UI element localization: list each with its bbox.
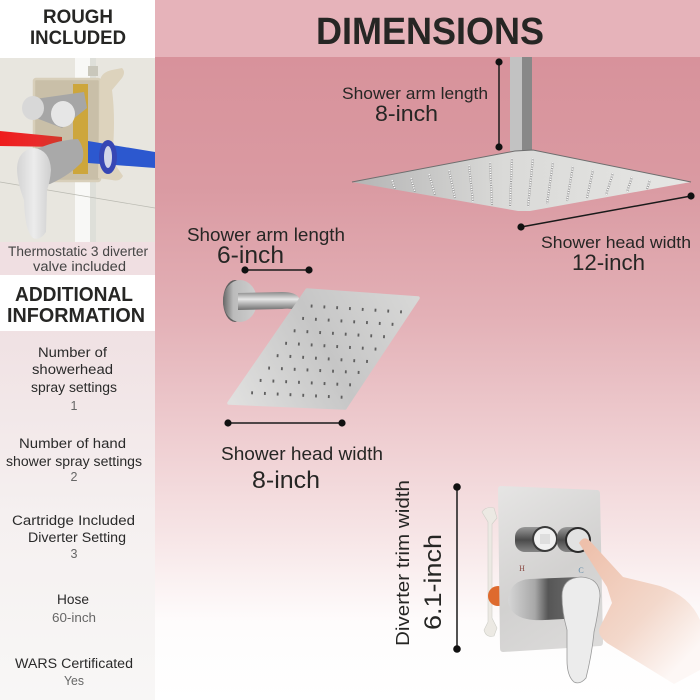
label: shower head width 12-inch: Shower head width: [541, 233, 691, 252]
info: showerhead spray settings: Number of: [38, 345, 107, 360]
H and C marks: H: [519, 564, 525, 573]
heading: additional information: [7, 284, 145, 327]
main background: [155, 57, 700, 700]
shower arm: [510, 57, 532, 151]
dimension: arm 8-inch: [495, 58, 503, 151]
info: showerhead spray settings: 1: [71, 399, 78, 413]
diverter knobs: [515, 526, 591, 553]
label: shower arm length 8-inch: 8-inch: [375, 101, 438, 126]
valve body behind plate: [482, 508, 508, 636]
label: shower head width 8-inch: Shower head width: [221, 444, 383, 464]
heading: rough included: INCLUDED: [30, 27, 126, 49]
header banner: [155, 0, 700, 57]
info: hand shower spray settings: Number of hand: [19, 436, 126, 451]
heading: additional information: ADDITIONAL: [15, 284, 133, 306]
H and C marks: C: [578, 566, 584, 575]
info: hand shower spray settings: 2: [71, 470, 78, 484]
caption: [0, 242, 155, 275]
info: hand shower spray settings: shower spray settings: [6, 454, 142, 469]
info: hand shower spray settings: [6, 436, 142, 484]
heading: rough included: [30, 6, 126, 49]
label: shower arm length 6-inch: 6-inch: [217, 242, 284, 269]
label: shower head width 8-inch: [221, 444, 383, 494]
caption: Thermostatic 3 diverter: [8, 244, 149, 259]
trim plate: [498, 486, 603, 652]
label: shower head width 8-inch: 8-inch: [252, 467, 320, 494]
dimension: arm 6-inch: [241, 266, 313, 274]
H and C marks: [519, 564, 584, 575]
label: shower head width 12-inch: [541, 233, 691, 275]
caption: valve included: [33, 259, 126, 274]
heading: rough included: ROUGH: [43, 6, 113, 28]
info: showerhead spray settings: [31, 345, 117, 413]
label: shower head width 12-inch: 12-inch: [572, 250, 645, 275]
mixer handle: [562, 577, 600, 683]
info: wars certificated: Yes: [64, 674, 84, 688]
dimension: trim 6.1-inch: [453, 483, 461, 653]
info: wars certificated: WARS Certificated: [15, 656, 133, 671]
panel: additional information: [0, 275, 155, 700]
dimension: head 12-inch: [517, 192, 695, 231]
info: hose: Hose: [57, 592, 89, 607]
12-inch ceiling shower: [342, 57, 695, 275]
shower head: [229, 290, 418, 408]
dimension: head 8-inch: [224, 419, 346, 427]
info: showerhead spray settings: spray settings: [31, 380, 117, 395]
info: wars certificated: [15, 656, 133, 688]
label: shower arm length 8-inch: Shower arm length: [342, 84, 488, 103]
label: shower arm length 8-inch: [342, 84, 488, 126]
photo: rough-in valve: [0, 58, 155, 242]
diverter trim: [393, 480, 700, 684]
info: cartridge diverter setting: [12, 513, 135, 561]
label: diverter trim width: Diverter trim width: [393, 480, 413, 646]
mixer hub: [508, 577, 582, 620]
info: hose: 60-inch: [52, 611, 96, 625]
hand pressing button: [579, 538, 700, 684]
info: cartridge diverter setting: Diverter Setting: [28, 530, 126, 545]
shower head: [352, 150, 691, 211]
label: shower arm length 6-inch: [187, 225, 345, 269]
title: DIMENSIONS: [316, 11, 544, 53]
label: 6.1-inch: 6.1-inch: [420, 534, 447, 630]
label: shower arm length 6-inch: Shower arm length: [187, 225, 345, 245]
info: cartridge diverter setting: Cartridge Included: [12, 513, 135, 528]
heading: additional information: INFORMATION: [7, 305, 145, 327]
info: hose: [52, 592, 96, 625]
info: cartridge diverter setting: 3: [71, 547, 78, 561]
info: showerhead spray settings: showerhead: [32, 362, 113, 377]
8-inch wall shower: [187, 225, 418, 494]
shower arm: [223, 280, 299, 322]
panel: rough included: [0, 0, 155, 275]
